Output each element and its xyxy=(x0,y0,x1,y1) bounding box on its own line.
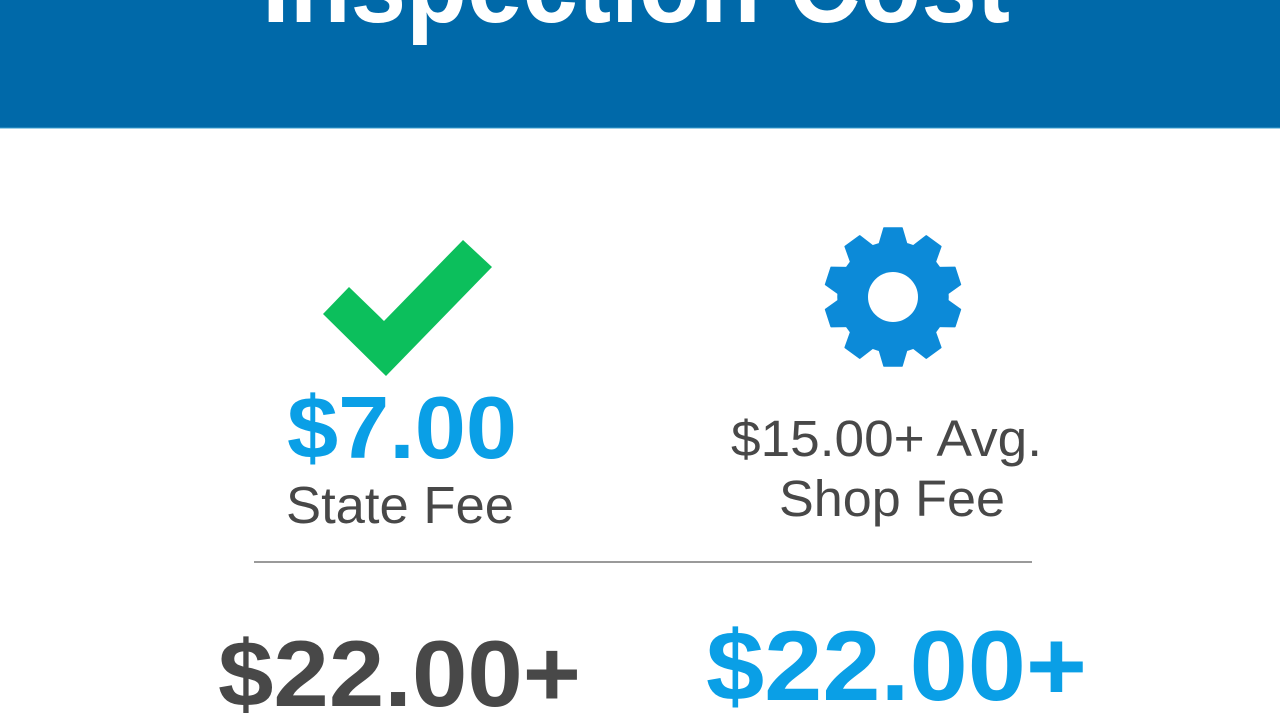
state fee label: State Fee xyxy=(286,477,514,535)
panel: state fee xyxy=(286,240,517,535)
icon: blue gear xyxy=(824,228,962,366)
icon: green check mark xyxy=(323,240,492,376)
shop fee label: Shop Fee xyxy=(779,470,1005,527)
panel: shop fee xyxy=(731,228,1042,527)
state fee amount: $7.00 xyxy=(287,378,517,477)
total amount: blue: $22.00+ xyxy=(706,610,1087,720)
shop fee label xyxy=(731,410,1042,527)
shop fee label: $15.00+ Avg. xyxy=(731,410,1042,467)
header banner xyxy=(0,0,1280,128)
